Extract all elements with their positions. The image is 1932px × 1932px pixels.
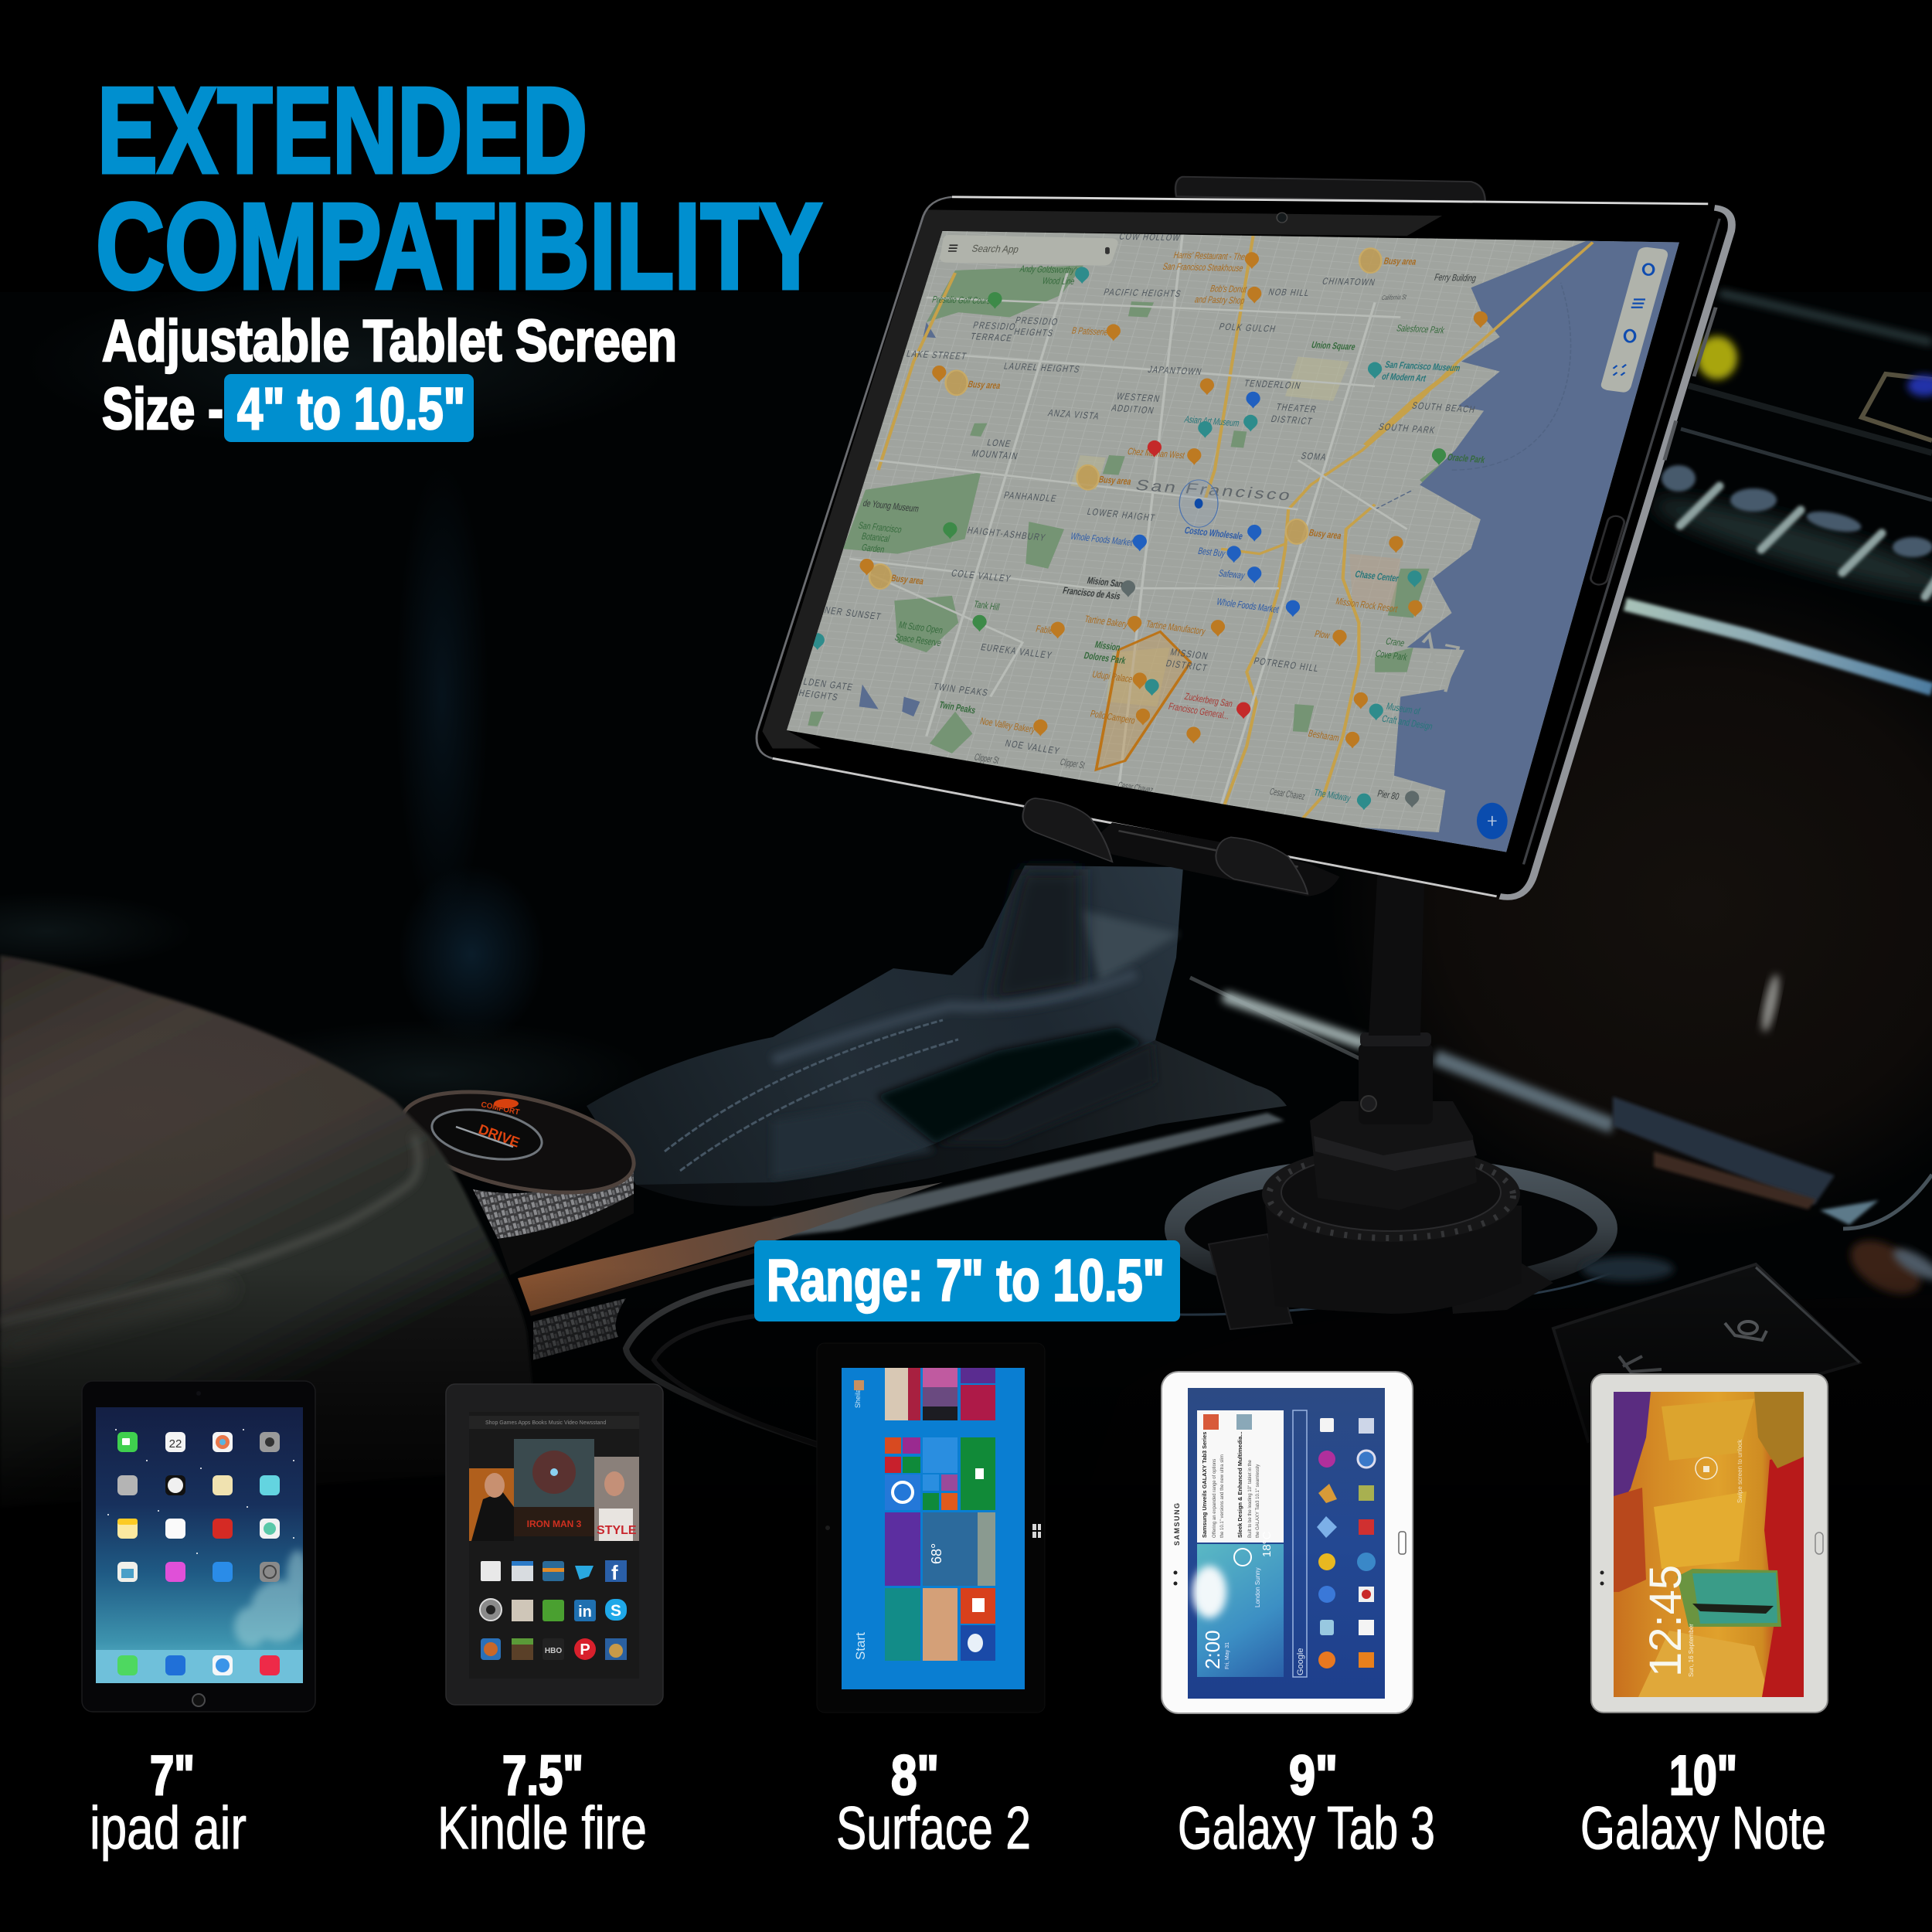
cup holders xyxy=(626,1167,1932,1507)
iPad app icons xyxy=(117,1432,280,1675)
map labels: PACIFIC HEIGHTS xyxy=(1103,287,1182,299)
news widget: Sleek Design & Enhanced Multimedia... xyxy=(1236,1431,1243,1538)
map labels: Francisco de Asis xyxy=(1061,586,1121,602)
boot leather xyxy=(587,866,1183,1185)
map labels: Museum of xyxy=(1385,702,1422,717)
device: iPad Air xyxy=(82,1381,315,1712)
map labels: Presidio Golf Course xyxy=(930,294,995,307)
map labels: de Young Museum xyxy=(862,498,920,515)
map labels: Andy Goldsworthy's xyxy=(1019,264,1081,276)
map labels: The Midway xyxy=(1313,787,1352,804)
climate buttons panel xyxy=(1553,1264,1859,1441)
tablet body xyxy=(757,196,1733,898)
start screen tiles: 68° xyxy=(929,1543,944,1564)
map labels: Mission xyxy=(1094,640,1121,653)
kindle app icons: HBO xyxy=(545,1647,562,1655)
size badge: 4" to 10.5" xyxy=(237,376,465,442)
map labels: Chez Maman West xyxy=(1126,447,1186,461)
note lock-screen painting: Sun, 16 September xyxy=(1688,1624,1695,1677)
map labels: Fable xyxy=(1035,624,1054,637)
news widget: Offering an expanded range of options xyxy=(1213,1459,1217,1538)
tab app icons xyxy=(1317,1418,1376,1668)
map labels: NER SUNSET xyxy=(823,605,883,622)
map labels: Busy area xyxy=(967,379,1002,392)
map labels xyxy=(798,232,1487,804)
map labels: PRESIDIO xyxy=(971,321,1017,332)
map labels: Tank Hill xyxy=(972,599,1001,613)
map labels: Twin Peaks xyxy=(937,700,977,716)
caption: 10 inch Galaxy Note: Galaxy Note xyxy=(1580,1794,1826,1862)
weather widget xyxy=(1192,1531,1284,1677)
map labels: Noe Valley Bakery xyxy=(979,716,1037,736)
map screen xyxy=(787,231,1679,852)
rotary drive knob: DRIVE xyxy=(477,1121,522,1151)
gooseneck xyxy=(1369,850,1425,1036)
boot base xyxy=(636,1040,1287,1206)
map labels: Tartine Bakery xyxy=(1083,614,1129,630)
kindle app icons: f xyxy=(611,1561,618,1584)
caption: 7 inch iPad Air: ipad air xyxy=(90,1794,247,1862)
map labels: TENDERLOIN xyxy=(1243,379,1302,391)
search bar: Search App xyxy=(971,243,1020,255)
kindle carousel xyxy=(469,1439,639,1541)
map labels: COW HOLLOW xyxy=(1117,232,1182,243)
cup holder mount and gooseneck xyxy=(1209,850,1553,1329)
range badge: Range: 7" to 10.5" xyxy=(767,1248,1165,1314)
title: COMPATIBILITY xyxy=(96,179,822,315)
device: Galaxy Note xyxy=(1591,1374,1828,1713)
map labels: Clipper St xyxy=(1059,757,1086,771)
caption: 7.5 inch Kindle Fire: Kindle fire xyxy=(437,1794,647,1862)
parks xyxy=(808,266,1464,753)
map labels: Harris' Restaurant - The xyxy=(1172,250,1247,263)
map labels: Busy area xyxy=(1308,528,1343,542)
range badge xyxy=(754,1240,1180,1321)
map labels: PRESIDIO xyxy=(1014,315,1060,328)
map labels: Mt Sutro Open xyxy=(897,620,944,636)
top bracket xyxy=(1175,177,1485,202)
weather widget: London Sunny xyxy=(1254,1567,1261,1607)
copper trim strip xyxy=(518,1182,943,1360)
bay water xyxy=(1355,238,1682,855)
map labels: Pier 80 xyxy=(1376,788,1400,802)
neighbourhood polygon xyxy=(1096,631,1190,770)
caption: 8 inch Surface 2: 8" xyxy=(891,1745,939,1807)
map labels: SOUTH BEACH xyxy=(1410,401,1477,415)
right toolbar xyxy=(1601,247,1668,393)
map labels: Wood Line xyxy=(1041,276,1076,287)
news widget: Built to be the leading 10" tablet in the xyxy=(1248,1459,1253,1538)
kindle app icons: S xyxy=(611,1602,621,1620)
map labels: Union Square xyxy=(1310,340,1356,352)
map labels: Francisco General... xyxy=(1167,702,1230,722)
device: Surface 2 xyxy=(817,1343,1045,1713)
map labels: Crane xyxy=(1384,636,1406,649)
map labels: THEATER xyxy=(1275,403,1318,415)
map labels: Ferry Building xyxy=(1433,273,1478,284)
map labels: MISSION xyxy=(1169,648,1209,662)
caption: 9 inch Galaxy Tab 3: 9" xyxy=(1289,1745,1338,1807)
map labels: NOE VALLEY xyxy=(1004,739,1061,757)
start screen tiles xyxy=(853,1368,995,1661)
map labels: LOWER HAIGHT xyxy=(1086,507,1157,524)
gear shift leather boot xyxy=(587,866,1287,1237)
location dot xyxy=(1179,480,1218,527)
driver seat xyxy=(0,955,541,1507)
caption: 7 inch iPad Air xyxy=(90,1745,247,1862)
map labels: Pollo Campero xyxy=(1089,709,1136,726)
subtitle: Size - xyxy=(102,376,223,442)
map labels: LAKE STREET xyxy=(905,349,968,362)
caption: 8 inch Surface 2: Surface 2 xyxy=(836,1794,1031,1862)
map labels: Cove Park xyxy=(1374,648,1409,663)
map labels: Clipper St xyxy=(973,753,1000,767)
map labels: San Francisco Museum xyxy=(1384,359,1461,374)
busy area markers xyxy=(869,248,1381,589)
map labels: Whole Foods Market xyxy=(1215,597,1280,615)
map labels: HEIGHTS xyxy=(1013,327,1055,338)
map labels: Tartine Manufactory xyxy=(1145,619,1207,638)
news widget: Samsung Unveils GALAXY Tab3 Series xyxy=(1201,1432,1208,1538)
google search bar: Google xyxy=(1296,1648,1305,1675)
dashboard controls upper right xyxy=(1625,293,1932,689)
start screen tiles: Start xyxy=(853,1632,868,1660)
weather widget: Fri, May 31 xyxy=(1225,1642,1230,1669)
map labels: SOMA xyxy=(1300,451,1328,463)
map labels: DISTRICT xyxy=(1165,658,1209,674)
kindle app icons: in xyxy=(578,1604,592,1621)
map labels: EUREKA VALLEY xyxy=(979,642,1053,662)
map labels: ANZA VISTA xyxy=(1046,408,1101,422)
kindle carousel: STYLE xyxy=(597,1524,637,1537)
map labels: Besharam xyxy=(1307,729,1340,744)
map labels: Best Buy xyxy=(1196,546,1227,560)
map land xyxy=(787,231,1679,852)
map labels: PANHANDLE xyxy=(1002,491,1058,505)
map labels: Plow xyxy=(1313,629,1331,641)
title: EXTENDED xyxy=(97,63,587,199)
map labels: Asian Art Museum xyxy=(1183,414,1240,429)
device: Galaxy Tab 3: SAMSUNG xyxy=(1173,1502,1181,1546)
news widget xyxy=(1197,1410,1284,1543)
hex nut xyxy=(1310,1101,1477,1210)
kindle nav bar xyxy=(469,1416,639,1429)
map labels: Craft and Design xyxy=(1380,713,1434,733)
map labels: Busy area xyxy=(889,573,925,587)
map labels: San Francisco xyxy=(1134,477,1294,504)
map labels: NOB HILL xyxy=(1267,287,1311,298)
pale commercial blocks xyxy=(1070,356,1400,706)
device: Galaxy Tab 3 xyxy=(1162,1372,1413,1713)
mount arms xyxy=(1209,1234,1553,1329)
map labels: Costco Wholesale xyxy=(1183,526,1244,542)
map labels: TERRACE xyxy=(969,332,1014,344)
teal pins xyxy=(811,267,1422,810)
caption: 10 inch Galaxy Note xyxy=(1580,1745,1826,1862)
map labels: POTRERO HILL xyxy=(1253,656,1321,674)
kindle carousel: IRON MAN 3 xyxy=(527,1519,582,1529)
rotary drive knob xyxy=(393,1073,643,1275)
bottom fade to black xyxy=(0,1267,1932,1932)
map labels: HAIGHT-ASHBURY xyxy=(966,526,1047,543)
bottom clips xyxy=(1022,798,1339,896)
rotary drive knob: COMFORT xyxy=(480,1100,520,1117)
caption: 9 inch Galaxy Tab 3: Galaxy Tab 3 xyxy=(1178,1794,1435,1862)
right console trim and light strip xyxy=(1190,978,1932,1305)
weather widget: 18°C xyxy=(1260,1531,1274,1557)
map labels: B Patisserie xyxy=(1070,325,1109,338)
map labels: of Modern Art xyxy=(1380,372,1427,384)
caption: 10 inch Galaxy Note: 10" xyxy=(1669,1745,1737,1807)
add button xyxy=(1477,803,1508,839)
map labels: JAPANTOWN xyxy=(1147,365,1203,377)
map labels: and Pastry Shop xyxy=(1193,294,1246,306)
map labels: Busy area xyxy=(1383,257,1418,267)
google search bar xyxy=(1293,1410,1307,1677)
map labels: MOUNTAIN xyxy=(971,449,1019,462)
map labels: WESTERN xyxy=(1115,392,1162,404)
map labels: Safeway xyxy=(1217,568,1247,581)
map labels: Salesforce Park xyxy=(1395,323,1446,336)
device: Kindle Fire xyxy=(446,1384,663,1705)
map labels: Botanical xyxy=(860,531,891,545)
map labels: Whole Foods Market xyxy=(1069,531,1134,549)
map labels: Dolores Park xyxy=(1083,651,1128,666)
map labels: ADDITION xyxy=(1111,403,1155,417)
map labels: TWIN PEAKS xyxy=(932,682,990,699)
caption: 9 inch Galaxy Tab 3 xyxy=(1178,1745,1435,1862)
blue haze behind seat xyxy=(0,278,672,1128)
map labels: Udupi Palace xyxy=(1091,669,1134,685)
map labels: LONE xyxy=(986,438,1012,450)
news widget: the GALAXY Tab3 10.1" seamlessly xyxy=(1256,1464,1260,1538)
collar xyxy=(1359,1032,1433,1124)
map labels: HEIGHTS xyxy=(798,689,840,703)
map labels: Zuckerberg San xyxy=(1183,692,1234,709)
caption: 7.5 inch Kindle Fire xyxy=(437,1745,647,1862)
map labels: Mission Rock Resort xyxy=(1335,597,1399,615)
map labels: Mision San xyxy=(1086,576,1124,590)
map labels: Cesar Chavez xyxy=(1268,787,1306,802)
main streets xyxy=(849,233,1407,805)
note lock-screen painting: 12:45 xyxy=(1641,1565,1691,1677)
windows logo xyxy=(1032,1524,1041,1538)
iPad app icons: 22 xyxy=(169,1437,182,1451)
note lock-screen painting: Swipe screen to unlock xyxy=(1736,1439,1743,1503)
map labels: COLE VALLEY xyxy=(950,569,1012,584)
caption: 8 inch Surface 2 xyxy=(836,1745,1031,1862)
map labels: Busy area xyxy=(1097,474,1133,488)
map labels: SOUTH PARK xyxy=(1377,422,1437,436)
map labels: Cesar Chavez xyxy=(1117,781,1154,796)
brown upper-right cabin panel xyxy=(1329,572,1932,1236)
map labels: Bob's Donut xyxy=(1209,284,1248,295)
mount body xyxy=(1265,1206,1522,1314)
start screen tiles: Sheila xyxy=(854,1389,862,1408)
weather widget: 2:00 xyxy=(1201,1630,1224,1669)
kindle nav bar: Shop Games Apps Books Music Video Newsstand xyxy=(485,1420,606,1426)
map labels: POLK GULCH xyxy=(1218,322,1277,335)
map labels: California St xyxy=(1381,293,1408,301)
map labels: LDEN GATE xyxy=(802,677,855,693)
blue pins xyxy=(1133,392,1300,617)
map labels: San Francisco Steakhouse xyxy=(1162,262,1244,274)
map labels: Space Reserve xyxy=(893,632,942,649)
caption: 7 inch iPad Air: 7" xyxy=(150,1745,195,1807)
subtitle xyxy=(102,308,677,442)
subtitle: Adjustable Tablet Screen xyxy=(102,308,677,374)
map labels: Garden xyxy=(860,543,886,556)
green and red pins xyxy=(943,292,1446,808)
note lock-screen painting xyxy=(1614,1392,1804,1697)
ribbed ring xyxy=(1262,1146,1520,1242)
map labels: DISTRICT xyxy=(1270,414,1314,427)
map labels: Chase Center xyxy=(1354,570,1400,584)
caption: 7.5 inch Kindle Fire: 7.5" xyxy=(502,1745,583,1807)
map labels: CHINATOWN xyxy=(1321,277,1377,288)
map labels: San Francisco xyxy=(857,520,903,536)
title xyxy=(96,63,822,315)
search bar xyxy=(940,235,1118,266)
kindle app icons xyxy=(480,1560,627,1660)
highways xyxy=(879,236,1593,820)
map labels: LAUREL HEIGHTS xyxy=(1002,362,1082,375)
kindle app icons: P xyxy=(580,1641,590,1658)
tablet holder with map screen xyxy=(734,155,1739,927)
food pins xyxy=(860,252,1488,749)
map labels: Oracle Park xyxy=(1446,452,1487,465)
news widget: the 10.1" versions and the new ultra slim xyxy=(1220,1454,1225,1538)
boot trim xyxy=(773,1113,1284,1237)
iPad screen xyxy=(96,1407,308,1683)
